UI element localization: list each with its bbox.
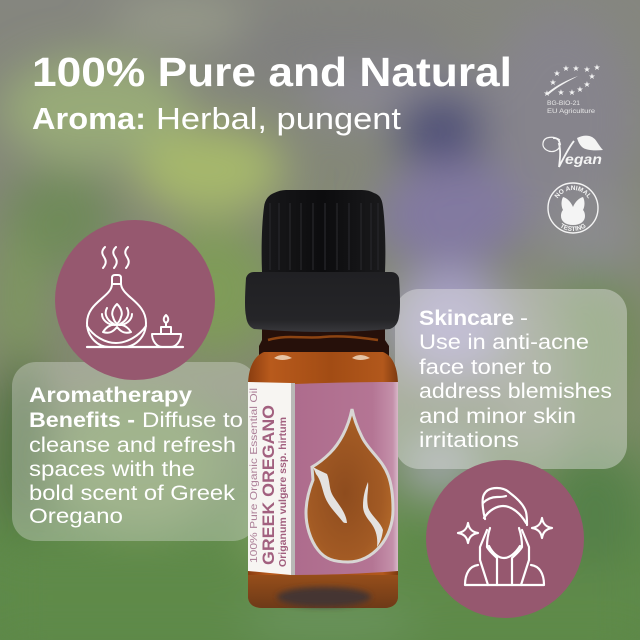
label vertical text: 100% Pure Organic Essential Oil (248, 388, 260, 563)
text: aromatherapy benefits (29, 384, 243, 528)
label white strip (248, 382, 291, 575)
icon: EU organic stars: ★ (553, 69, 561, 78)
subtitle: aroma: Aroma: (32, 101, 146, 136)
icon: EU organic stars: ★ (543, 89, 551, 98)
panel: aromatherapy text card (12, 362, 257, 541)
icon: EU organic stars: EU Agriculture (547, 108, 595, 115)
icon: EU organic stars: ★ (583, 65, 591, 74)
text: skincare description: - (520, 307, 528, 330)
text: aromatherapy benefits: Oregano (29, 505, 123, 528)
text: aromatherapy benefits: cleanse and refresh (29, 434, 236, 457)
label vertical text: Origanum vulgare ssp. hirtum (277, 417, 289, 567)
subtitle: aroma (32, 101, 401, 136)
text: skincare description (419, 307, 612, 452)
text: aromatherapy benefits: Diffuse to (142, 409, 243, 432)
icon: EU organic stars: ★ (562, 64, 570, 73)
text: aromatherapy benefits: Aromatherapy (29, 384, 192, 407)
icon: EU organic stars: ★ (583, 80, 591, 89)
icon: no animal testing badge: NO ANIMAL (554, 186, 590, 198)
cap ribs (270, 203, 378, 270)
panel: aromatherapy circle icon (55, 220, 215, 380)
icon: EU organic stars (543, 63, 601, 115)
icon: no animal testing badge: TESTING (561, 223, 586, 231)
text: aromatherapy benefits: Benefits - (29, 409, 135, 432)
icon: woman with towel and sparkles (458, 488, 552, 585)
bottle neck (259, 328, 389, 356)
icon: EU organic stars: ★ (549, 78, 557, 87)
text: skincare description: irritations (419, 429, 519, 452)
bottle glass body (248, 352, 398, 608)
icon: vegan logo: egan (565, 151, 602, 167)
icon: EU organic stars: ★ (557, 88, 565, 97)
icon: EU organic stars: BG-BIO-21 (547, 100, 580, 107)
drop emblem (306, 409, 393, 562)
panel: skincare circle icon (426, 460, 584, 618)
label vertical text: GREEK OREGANO (259, 405, 278, 565)
text: aromatherapy benefits: spaces with the (29, 458, 195, 481)
icon: EU organic stars: ★ (593, 63, 601, 72)
text: skincare description: Use in anti-acne (419, 331, 589, 354)
text: skincare description: face toner to (419, 356, 552, 379)
dropper cap (262, 190, 385, 272)
icon: vegan logo (543, 136, 603, 167)
bottle (245, 190, 400, 608)
icon: diffuser with lotus and candle (87, 247, 183, 347)
text: skincare description: Skincare (419, 307, 514, 330)
icon: EU organic stars: ★ (588, 72, 596, 81)
text: skincare description: and minor skin (419, 405, 576, 428)
label vertical text (248, 388, 289, 567)
bottle base shadow (248, 575, 398, 608)
title: 100% Pure and Natural (32, 49, 512, 95)
text: skincare description: address blemishes (419, 380, 612, 403)
icon: EU organic stars: ★ (576, 85, 584, 94)
dropper collar (245, 272, 400, 332)
text: aromatherapy benefits: bold scent of Greek (29, 482, 236, 505)
label pink area (295, 382, 398, 575)
icon: no animal testing badge (547, 182, 599, 234)
icon: EU organic stars: ★ (568, 88, 576, 97)
icon: EU organic stars: ★ (572, 64, 580, 73)
panel: skincare text card (395, 289, 627, 469)
subtitle: aroma: Herbal, pungent (156, 101, 401, 136)
